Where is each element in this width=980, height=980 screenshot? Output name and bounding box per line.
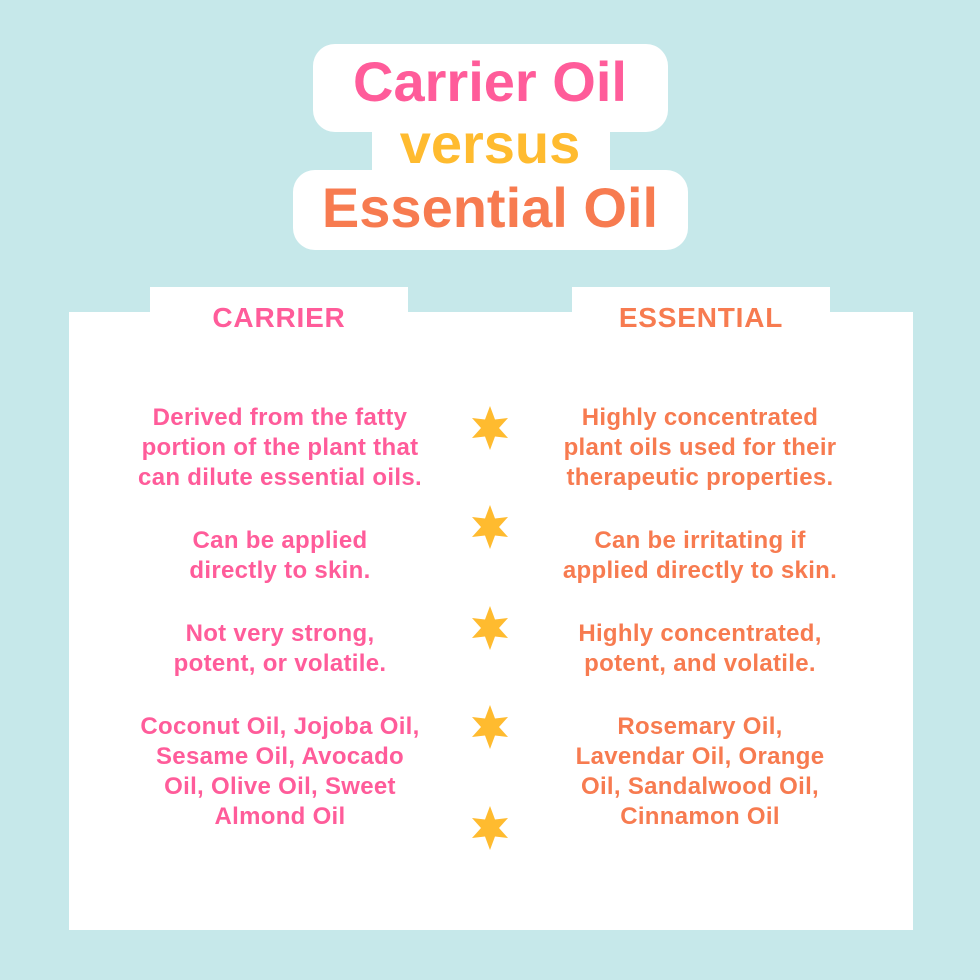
comparison panel	[69, 287, 913, 930]
carrier text 1: can dilute essential oils.	[138, 464, 422, 491]
carrier text 3: potent, or volatile.	[174, 650, 386, 677]
essential text 3: Highly concentrated,	[578, 620, 822, 647]
essential text 4: Rosemary Oil,	[617, 713, 783, 740]
star 4	[472, 705, 508, 749]
title: Carrier Oil: Carrier Oil	[353, 50, 627, 113]
carrier text 1: Derived from the fatty	[153, 404, 407, 431]
tab: essential: ESSENTIAL	[619, 302, 783, 333]
essential text 3: potent, and volatile.	[584, 650, 816, 677]
essential text 2: applied directly to skin.	[563, 557, 837, 584]
carrier text 2	[189, 527, 371, 584]
tab: carrier	[150, 287, 408, 347]
carrier text 1	[138, 404, 422, 491]
essential text 1: Highly concentrated	[582, 404, 818, 431]
essential text 4: Oil, Sandalwood Oil,	[581, 773, 819, 800]
carrier text 4: Oil, Olive Oil, Sweet	[164, 773, 396, 800]
essential text 1: therapeutic properties.	[567, 464, 833, 491]
title: Essential Oil: Essential Oil	[322, 176, 658, 239]
carrier text 2: directly to skin.	[189, 557, 371, 584]
essential text 3	[578, 620, 822, 677]
essential text 1: plant oils used for their	[564, 434, 836, 461]
carrier text 1: portion of the plant that	[142, 434, 418, 461]
essential text 4: Lavendar Oil, Orange	[576, 743, 824, 770]
essential text 4: Cinnamon Oil	[620, 803, 780, 830]
star 3	[472, 606, 508, 650]
essential text 2: Can be irritating if	[594, 527, 806, 554]
star 1	[472, 406, 508, 450]
star 5	[472, 806, 508, 850]
carrier text 4	[140, 713, 420, 830]
carrier text 3	[174, 620, 386, 677]
essential text 2	[563, 527, 837, 584]
star 2	[472, 505, 508, 549]
title: versus: versus	[400, 112, 580, 175]
carrier text 4: Almond Oil	[214, 803, 346, 830]
carrier text 4: Coconut Oil, Jojoba Oil,	[140, 713, 420, 740]
essential text 1	[564, 404, 836, 491]
title card	[293, 44, 688, 250]
tab: carrier: CARRIER	[212, 302, 346, 333]
carrier text 3: Not very strong,	[186, 620, 374, 647]
essential text 4	[576, 713, 824, 830]
tab: essential	[572, 287, 830, 347]
carrier text 2: Can be applied	[193, 527, 367, 554]
carrier text 4: Sesame Oil, Avocado	[156, 743, 404, 770]
